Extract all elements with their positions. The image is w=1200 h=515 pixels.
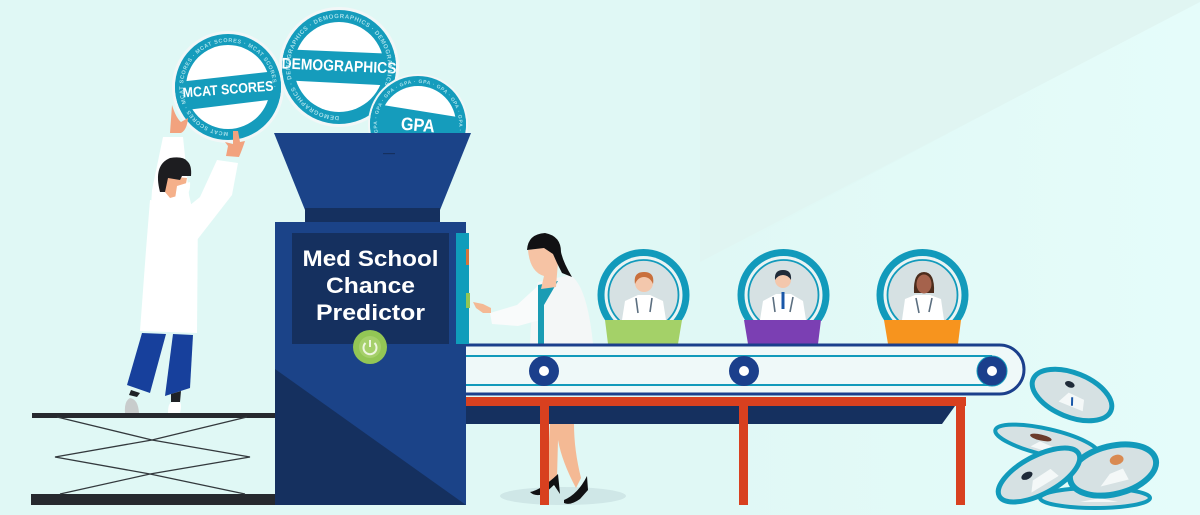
right sleeve raised <box>184 160 238 240</box>
coat <box>530 275 593 344</box>
sphere 1 <box>598 249 690 321</box>
background wedge light <box>700 0 1200 515</box>
hand <box>473 302 491 313</box>
right trouser leg <box>165 334 193 396</box>
pile of fallen discs <box>990 359 1161 513</box>
boxes on conveyor <box>605 320 961 344</box>
fallen disc front <box>990 437 1088 513</box>
lifting platform <box>31 413 277 505</box>
disc: demographics: DEMOGRAPHICS · DEMOGRAPHICS · DEMOGRAPHICS · DEMOGRAPHICS · <box>286 14 392 120</box>
neck and face <box>528 246 558 289</box>
hopper <box>274 133 471 223</box>
machine body <box>275 222 469 505</box>
roller 3 <box>977 356 1007 386</box>
dark triangle <box>275 369 466 505</box>
spheres with doctors <box>598 249 968 321</box>
disc: GPA: GPA · GPA · GPA · GPA · GPA · GPA · GPA · GPA · GPA · GPA · GPA · <box>374 80 462 133</box>
hair <box>527 233 572 277</box>
machine title: Chance <box>326 273 415 298</box>
coat <box>140 200 198 333</box>
power button <box>353 330 387 364</box>
disc: demographics: DEMOGRAPHICS <box>281 55 397 77</box>
sphere 2 <box>738 249 830 321</box>
floor shadow <box>500 487 626 505</box>
left trouser leg <box>127 333 166 393</box>
right hand <box>225 131 245 157</box>
machine title: Med School <box>302 246 438 271</box>
background wedge shaded <box>700 0 1200 262</box>
neck and face <box>165 176 187 198</box>
fallen disc top <box>1025 359 1119 431</box>
socks <box>129 390 181 402</box>
arm <box>490 283 541 326</box>
roller 2 <box>729 356 759 386</box>
control lights <box>466 249 470 308</box>
fallen disc bottom <box>1040 488 1150 508</box>
shoes <box>530 474 560 495</box>
fallen disc back <box>992 417 1102 467</box>
roller 1 <box>529 356 559 386</box>
fallen disc right <box>1065 436 1161 504</box>
disc: GPA <box>368 74 468 133</box>
disc: GPA: GPA <box>400 114 436 136</box>
conveyor support frame <box>466 397 966 505</box>
figure: man in white coat holding disc <box>125 105 245 413</box>
conveyor belt <box>420 345 1024 394</box>
sphere 3 <box>876 249 968 321</box>
left hand <box>170 105 188 133</box>
machine title: Predictor <box>316 300 425 325</box>
shoes <box>125 398 139 413</box>
figure: woman doctor pressing button <box>473 233 626 505</box>
disc: MCAT scores: MCAT SCORES <box>182 77 274 101</box>
side control strip <box>456 233 469 344</box>
hair <box>158 157 191 192</box>
disc: MCAT scores: MCAT SCORES · MCAT SCORES · MCAT SCORES · MCAT SCORES · <box>179 38 276 136</box>
left sleeve raised <box>150 137 196 225</box>
scrubs <box>538 281 558 344</box>
mask <box>175 182 190 200</box>
legs <box>549 424 581 488</box>
label panel <box>292 233 449 344</box>
